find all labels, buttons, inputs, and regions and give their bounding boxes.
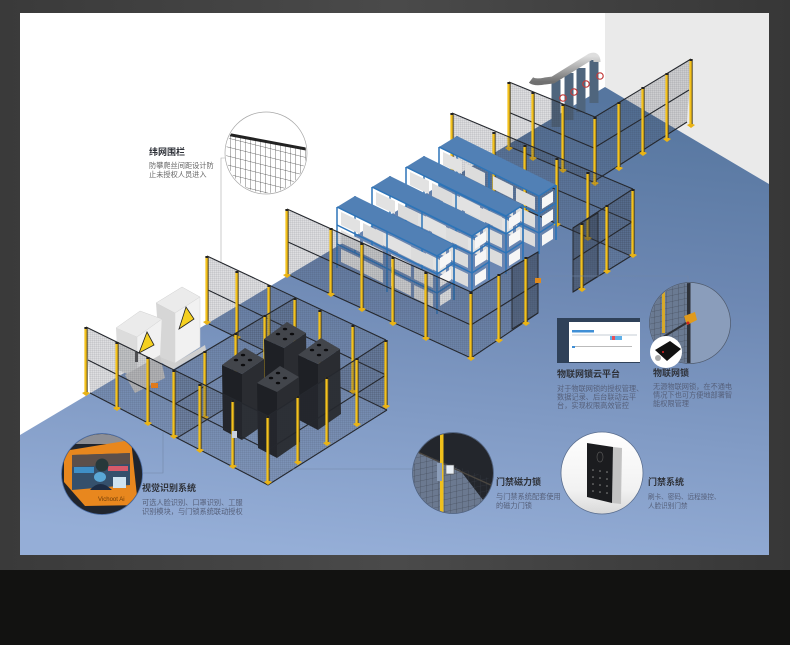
description: 无源物联网锁，在不通电 [653,382,732,391]
description: 人脸识别门禁 [648,501,688,510]
description: 对于物联网锁的授权管理、 [557,384,643,393]
heading: 物联网锁 [653,367,689,378]
icon: mesh detail circle [225,112,307,195]
description: 能权限管理 [653,399,689,408]
description: 情况下也可方便地部署智 [653,391,732,400]
leader lines [143,158,688,473]
description: 的磁力门锁 [496,501,532,510]
description: 可选人脸识别、口罩识别、工服 [142,498,243,507]
fence: server enclosure front [82,327,390,485]
fence zone: back of server enclosure [203,256,387,410]
callout: cloud platform [557,318,643,410]
fence zone: middle enclosure with door [448,113,633,256]
fence: server enclosure inner partition [174,298,299,438]
description: 止未授权人员进入 [149,170,207,179]
description: 台，实现权限高效管控 [557,401,629,410]
callout: mesh fence [149,112,307,195]
callout: vision recognition [62,434,243,516]
fence zone: shelves [283,209,541,361]
heading: 纬网围栏 [149,146,185,157]
description: 刷卡、密码、远程操控、 [648,494,721,501]
description: 防攀爬丝间距设计防 [149,161,214,170]
icon: vision terminal circle: Vichoot Ai [98,497,125,503]
callout: access control [561,432,721,514]
fence: enclosure door side [573,189,637,292]
icon: magnetic lock circle [412,432,494,514]
platform screenshot [557,318,640,363]
heading: 视觉识别系统 [142,482,196,493]
heading: 门禁磁力锁 [496,476,541,487]
description: 与门禁系统配套使用 [496,492,561,501]
description: 数据记录、后台联动云平 [557,393,636,402]
heading: 物联网锁云平台 [557,368,620,379]
description: 识别模块，与门锁系统联动授权 [142,507,243,516]
electrical cabinets with warning signs [116,287,206,393]
icon: lock fob [650,336,682,368]
heading: 门禁系统 [648,476,684,487]
fence zone: pipe area [505,59,695,186]
icon: vision terminal circle [62,434,142,514]
icon: keypad circle [561,432,643,514]
callout: magnetic lock [412,432,561,514]
pipes with red valves [531,56,603,127]
shelving racks with white bins [337,136,556,314]
callout: IoT lock [650,282,732,408]
server racks [222,322,341,458]
icon: lock detail circle [650,282,730,364]
scene room: walls and floor [20,13,769,555]
